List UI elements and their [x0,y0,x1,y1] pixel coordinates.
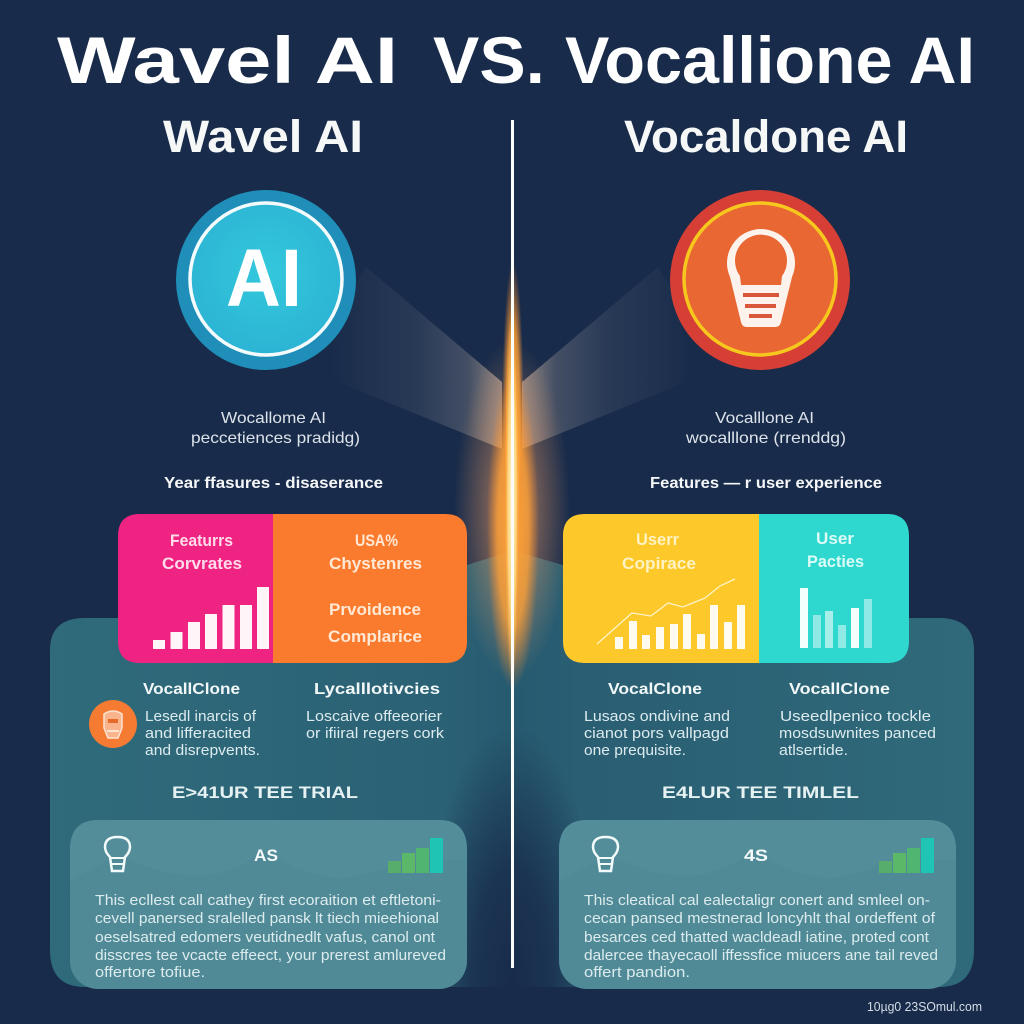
lower center fade [422,725,602,1024]
paragraph: offertore tofiue. [95,964,205,981]
text block: right column two: Useedlpenico tockle [780,708,931,725]
title: Vocallione AI [565,23,975,97]
label: left column one: VocallClone [143,681,240,698]
line and bar chart: yellow [597,579,745,649]
label: right column two: VocallClone [789,681,890,698]
text block: left column one: and disrepvents. [145,742,260,759]
paragraph [95,892,446,981]
text block: right description: wocalllone (rrenddg) [685,430,846,447]
label: left column two: Lycalllotivcies [314,681,440,698]
central glow [454,260,570,690]
teal card text [807,529,864,571]
icon: AI circle: AI [226,233,302,324]
text block: right description: Features — r user experience [650,475,882,492]
text block: left column one [145,708,260,759]
panel: right trial card [559,820,956,989]
light rays toward the circles [301,267,723,449]
bar chart: teal [800,588,872,648]
text block: right column two: atlsertide. [779,742,848,759]
paragraph: cevell panersed sralelled pansk lt tiech mieehional [95,910,439,927]
paragraph: dalercee thayecaoll iffessfice miucers ane tail reved [584,947,938,964]
section heading: right trial: E4LUR TEE TIMLEL [662,783,859,802]
paragraph: This cleatical cal ealectaligr conert and smleel on- [584,892,930,909]
yellow card text [622,530,696,573]
text block: left column two: Loscaive offeeorier [306,708,442,725]
text block: right column one: one prequisite. [584,742,686,759]
text block: right description: Vocalllone AI [715,410,814,427]
orange card text: USA% [355,531,398,550]
title [57,23,975,97]
teal card text: User [816,529,854,548]
bar chart: pink [153,587,269,649]
title: VS. [433,23,545,97]
text block: right column one [584,708,730,759]
title: Wavel AI [57,23,398,97]
center divider line [511,120,514,968]
text block: left description: Year ffasures - disaserance [164,475,383,492]
paragraph: This ecllest call cathey first ecoraition et eftletoni- [95,892,441,909]
text block: left description [164,410,383,492]
text block: left description: peccetiences pradidg) [191,430,360,447]
footer url: 10µg0 23SOmul.com [867,999,982,1014]
panel: left trial card [70,820,467,989]
label: 4S: 4S [744,846,768,865]
paragraph: oeselsatred edomers veutidnedlt vafus, canol ont [95,929,436,946]
heading: left: Wavel AI [163,111,363,162]
text block: left column two [306,708,445,742]
pink card text: Corvrates [162,554,242,573]
panel: left teal background [50,551,512,987]
text block: left column one: and lifferacited [145,725,251,742]
icon: AI circle [176,190,356,370]
orange card text [328,531,422,646]
panel: right teal background [514,551,974,987]
label: AS: AS [254,846,278,865]
icon: light bulb circle [670,190,850,370]
text block: left column two: or ifiiral regers cork [306,725,445,742]
panel: pink and orange feature card [118,514,467,663]
heading: right: Vocaldone AI [624,111,908,162]
paragraph: cecan pansed mestnerad loncyhlt thal ordeffent of [584,910,936,927]
bar chart: mini green [879,838,934,873]
orange card text: Chystenres [329,554,422,573]
text block: right column one: cianot pors vallpagd [584,725,729,742]
paragraph [584,892,938,981]
paragraph: offert pandion. [584,964,690,981]
paragraph: disscres tee vcacte effeect, your prerest amlureved [95,947,446,964]
icon: bulb outline [105,837,130,871]
panel: yellow and teal user card [563,514,909,663]
orange card text: Prvoidence [329,600,421,619]
bar chart: mini green [388,838,443,873]
yellow card text: Userr [636,530,679,549]
teal card text: Pacties [807,552,864,571]
pink card text [162,531,242,573]
text block: left column one: Lesedl inarcis of [145,708,257,725]
icon: orange badge [89,700,137,748]
yellow card text: Copirace [622,554,696,573]
section heading: left trial: E>41UR TEE TRIAL [172,783,358,802]
text block: right column one: Lusaos ondivine and [584,708,730,725]
pink card text: Featurrs [170,531,233,550]
text block: right column two [779,708,936,759]
orange card text: Complarice [328,627,422,646]
text block: right column two: mosdsuwnites panced [779,725,936,742]
icon: bulb outline [593,837,618,871]
text block: right description [650,410,882,492]
text block: left description: Wocallome AI [221,410,326,427]
paragraph: besarces ced thatted wacldeadl iatine, proted cont [584,929,930,946]
label: right column one: VocalClone [608,681,702,698]
